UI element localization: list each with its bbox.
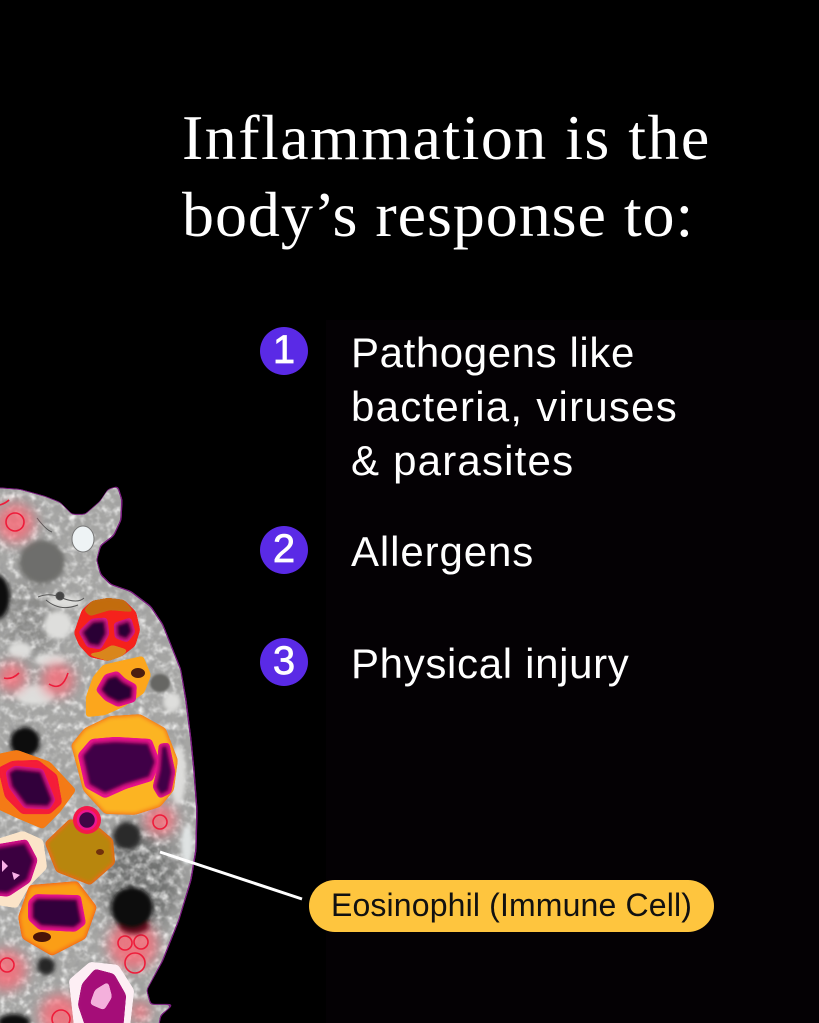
granule: left orange red	[0, 750, 76, 829]
grey organelles	[19, 540, 65, 584]
list item 3 number	[260, 638, 308, 686]
granule: large orange	[72, 715, 177, 814]
list item 1 text: Pathogens like	[351, 329, 635, 376]
title: body’s response to:	[182, 179, 694, 250]
list item 1 text	[351, 329, 678, 484]
callout label	[309, 880, 714, 932]
list item 1 number	[260, 327, 308, 375]
pale patches	[8, 596, 193, 865]
darker lower cytoplasm	[100, 830, 180, 930]
title	[182, 102, 711, 250]
list item 3 number: 3	[273, 639, 295, 683]
granule: white and magenta left	[0, 831, 47, 908]
list item 1 number: 1	[273, 328, 295, 372]
list item 2 number: 2	[273, 527, 295, 571]
illustration: eosinophil immune cell micrograph	[0, 486, 198, 1023]
list item 1 text: bacteria, viruses	[351, 383, 678, 430]
cell body	[0, 486, 198, 1023]
pink haze and rings	[0, 504, 175, 1023]
granule: olive	[46, 806, 114, 884]
list item 2 number	[260, 526, 308, 574]
list item 2 text: Allergens	[351, 528, 534, 575]
granule: lower orange	[19, 882, 96, 955]
granule: red with two cores	[74, 598, 140, 661]
title: Inflammation is the	[182, 102, 711, 173]
dark spots	[0, 575, 153, 1023]
vesicles	[37, 518, 84, 608]
granule: orange small	[86, 656, 151, 717]
list item 1 text: & parasites	[351, 437, 574, 484]
list item 3 text: Physical injury	[351, 640, 629, 687]
callout label: Eosinophil (Immune Cell)	[331, 887, 692, 923]
granule: bottom magenta	[69, 962, 134, 1023]
